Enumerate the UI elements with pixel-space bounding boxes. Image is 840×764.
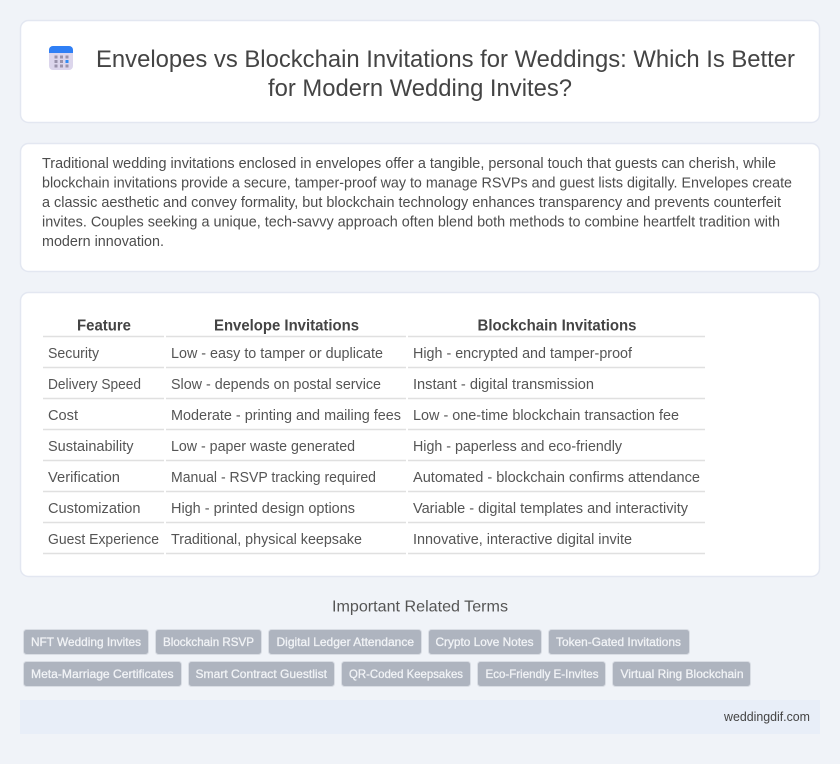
table heading row: Blockchain Invitations — [478, 318, 636, 334]
title: Envelopes vs Blockchain Invitations for Weddings: Which Is Better — [96, 46, 795, 73]
table row: verification — [43, 470, 705, 492]
text block: introduction paragraph: blockchain invitations provide a secure, tamper-proof way to manage RSVPs and guest lists digitally. Envelopes create — [42, 176, 792, 192]
tag: Token-Gated Invitations — [556, 635, 681, 649]
text block: introduction paragraph: a classic aesthetic and convey formality, but blockchain technology enhances transparency and prevents counterfeit — [42, 195, 781, 211]
table row: sustainability: High - paperless and eco-friendly — [413, 439, 623, 455]
tags: related terms — [24, 630, 750, 686]
table row: cost: Cost — [48, 408, 78, 424]
table row: delivery speed: Slow - depends on postal service — [171, 377, 381, 393]
title: for Modern Wedding Invites? — [268, 75, 572, 102]
footer: weddingdif.com — [723, 710, 810, 724]
table row: verification: Verification — [48, 470, 120, 486]
tag — [342, 662, 470, 686]
tag — [188, 662, 334, 686]
table row: security: Security — [48, 346, 100, 362]
text block: introduction paragraph: modern innovation. — [42, 234, 164, 250]
table row: delivery speed — [43, 377, 705, 398]
panel: header card — [20, 20, 820, 122]
table row: customization: Customization — [48, 501, 140, 517]
tag — [478, 662, 606, 686]
table row: cost: Moderate - printing and mailing fees — [171, 408, 401, 424]
heading: important related terms: Important Related Terms — [332, 598, 508, 616]
table row: cost: Low - one-time blockchain transaction fee — [413, 408, 679, 424]
text block: introduction paragraph: Traditional wedding invitations enclosed in envelopes offer a tangible, personal touch that guests can cherish, while — [42, 156, 776, 172]
table row: sustainability — [43, 439, 705, 460]
panel: comparison table — [20, 292, 820, 576]
tag: QR-Coded Keepsakes — [349, 667, 463, 681]
table heading row — [43, 318, 705, 336]
table row: cost — [43, 408, 705, 430]
table row: verification: Manual - RSVP tracking required — [171, 470, 376, 486]
tag: Smart Contract Guestlist — [196, 667, 328, 681]
tag: Crypto Love Notes — [436, 635, 534, 649]
panel: introduction — [20, 144, 820, 272]
table heading row: Feature — [77, 318, 131, 334]
tag — [428, 630, 542, 654]
table row: guest experience: Innovative, interactive digital invite — [413, 532, 632, 548]
tag: NFT Wedding Invites — [31, 635, 141, 649]
tag — [24, 630, 148, 654]
footer — [20, 700, 820, 734]
tag: Digital Ledger Attendance — [276, 635, 414, 649]
icon: calendar — [49, 46, 73, 70]
table row: verification: Automated - blockchain confirms attendance — [413, 470, 700, 486]
text block: introduction paragraph — [42, 156, 792, 250]
table row: security — [43, 346, 705, 368]
table row: sustainability: Low - paper waste generated — [171, 439, 355, 455]
table row: delivery speed: Delivery Speed — [48, 377, 141, 393]
table row: guest experience: Guest Experience — [48, 532, 159, 548]
tag: Meta-Marriage Certificates — [31, 667, 174, 681]
tag — [24, 662, 182, 686]
table row: customization — [43, 501, 705, 522]
table row: guest experience: Traditional, physical keepsake — [171, 532, 362, 548]
title — [96, 46, 795, 102]
tag — [156, 630, 262, 654]
table row: security: High - encrypted and tamper-proof — [413, 346, 633, 362]
tag: Eco-Friendly E-Invites — [486, 667, 598, 681]
tag: Blockchain RSVP — [163, 635, 254, 649]
table row: security: Low - easy to tamper or duplicate — [171, 346, 383, 362]
table row: delivery speed: Instant - digital transmission — [413, 377, 594, 393]
tag — [612, 662, 750, 686]
table heading row: Envelope Invitations — [214, 318, 359, 334]
table row: guest experience — [43, 532, 705, 554]
text block: introduction paragraph: invites. Couples seeking a unique, tech-savvy approach often blend both methods to combine heartfelt tradition with — [42, 214, 780, 230]
tag: Virtual Ring Blockchain — [620, 667, 744, 681]
table row: customization: Variable - digital templates and interactivity — [413, 501, 689, 517]
table row: customization: High - printed design options — [171, 501, 355, 517]
table row: sustainability: Sustainability — [48, 439, 134, 455]
tag — [548, 630, 690, 654]
tag — [268, 630, 422, 654]
